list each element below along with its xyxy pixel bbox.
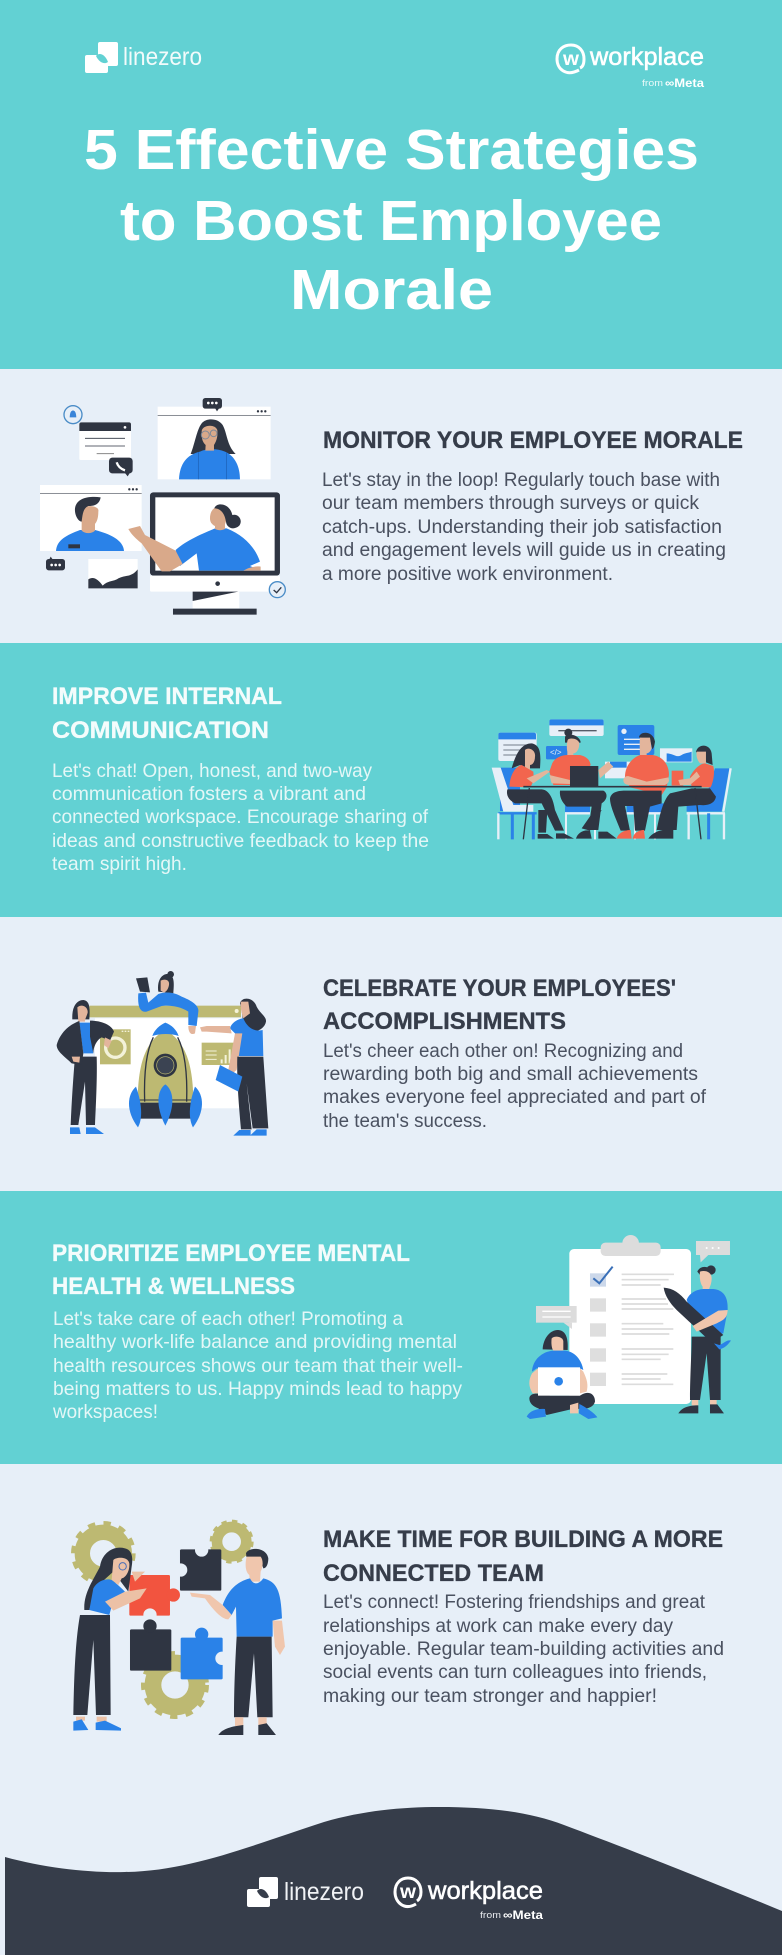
title: 5 Effective Strategies	[84, 118, 699, 182]
body text: catch-ups. Understanding their job satisfaction	[322, 517, 722, 538]
panel: building a connected team	[0, 1464, 782, 1955]
logo: workplace from Meta: ∞Meta	[503, 1908, 543, 1922]
body text: the team's success.	[323, 1111, 487, 1132]
heading	[52, 683, 282, 744]
logo: linezero	[247, 1877, 364, 1907]
panel: celebrate accomplishments	[0, 917, 782, 1191]
standing person with pen	[664, 1265, 731, 1413]
body text: health resources shows our team that their well-	[53, 1356, 463, 1377]
body text: Let's cheer each other on! Recognizing and	[323, 1041, 683, 1062]
body text: making our team stronger and happier!	[323, 1686, 657, 1707]
heading: ACCOMPLISHMENTS	[323, 1008, 566, 1035]
logo: linezero	[85, 42, 202, 73]
illustration: team meeting	[492, 719, 731, 839]
body text: a more positive work environment.	[322, 564, 613, 585]
heading: IMPROVE INTERNAL	[52, 683, 282, 710]
chairs	[492, 768, 731, 839]
body text: team spirit high.	[52, 854, 187, 875]
body text: Let's connect! Fostering friendships and great	[323, 1592, 706, 1613]
logo: workplace from Meta: w	[562, 49, 579, 70]
puzzle pieces	[129, 1543, 229, 1679]
body text: healthy work-life balance and providing mental	[53, 1332, 457, 1353]
logo: linezero: linezero	[123, 43, 202, 71]
browser window	[89, 1006, 241, 1108]
footer wave	[5, 1807, 782, 1955]
body text: being matters to us. Happy minds lead to happy	[53, 1379, 462, 1400]
heading: PRIORITIZE EMPLOYEE MENTAL	[52, 1240, 410, 1267]
illustration: rocket launch	[57, 971, 268, 1136]
panel: monitor employee morale	[0, 369, 782, 643]
heading	[323, 1526, 723, 1587]
body text	[322, 470, 726, 585]
logo: workplace from Meta: from	[480, 1910, 501, 1920]
person 4	[648, 746, 716, 839]
floating cards	[498, 719, 692, 786]
panel: header	[0, 0, 782, 369]
body text	[323, 1592, 724, 1707]
illustration: video call	[40, 398, 285, 615]
person 1	[507, 743, 574, 839]
bubble: chat	[203, 398, 222, 411]
logo: workplace from Meta: workplace	[427, 1877, 543, 1905]
title	[84, 118, 699, 322]
body text: Let's chat! Open, honest, and two-way	[52, 761, 372, 782]
body text: Let's take care of each other! Promoting a	[53, 1309, 403, 1330]
logo: workplace from Meta: w	[399, 1882, 416, 1903]
logo: workplace from Meta: from	[642, 78, 663, 88]
body text: workspaces!	[52, 1402, 158, 1423]
body text: rewarding both big and small achievements	[323, 1064, 698, 1085]
body text	[52, 761, 429, 875]
heading: COMMUNICATION	[52, 717, 269, 744]
panel: mental health and wellness	[0, 1191, 782, 1464]
card: message	[79, 422, 131, 460]
body text: relationships at work can make every day	[323, 1616, 673, 1637]
body text: our team members through surveys or quick	[322, 493, 699, 514]
seated woman with laptop	[527, 1330, 597, 1419]
heading: MAKE TIME FOR BUILDING A MORE	[323, 1526, 723, 1553]
body text: Let's stay in the loop! Regularly touch base with	[322, 470, 720, 491]
body text: communication fosters a vibrant and	[52, 784, 366, 805]
body text	[52, 1309, 463, 1423]
heading: HEALTH & WELLNESS	[52, 1273, 295, 1300]
heading	[52, 1240, 410, 1300]
heading: MONITOR YOUR EMPLOYEE MORALE	[323, 427, 743, 454]
illustration: checklist	[527, 1235, 731, 1419]
panel: improve internal communication	[0, 643, 782, 917]
table	[523, 787, 702, 839]
monitor with presenter	[128, 492, 280, 615]
rocket	[129, 1023, 202, 1127]
body text: social events can turn colleagues into friends,	[323, 1662, 707, 1683]
person 2 with laptop	[549, 729, 617, 839]
logo: workplace from Meta	[395, 1877, 543, 1922]
title: to Boost Employee	[120, 189, 662, 253]
man	[190, 1549, 285, 1735]
heading	[323, 975, 676, 1035]
body text: ideas and constructive feedback to keep the	[52, 831, 429, 852]
logo: workplace from Meta: ∞Meta	[665, 76, 704, 90]
body text: enjoyable. Regular team-building activities and	[323, 1639, 724, 1660]
left person	[57, 1000, 114, 1134]
window: woman with glasses	[158, 407, 271, 479]
right person with folder	[200, 999, 268, 1136]
woman	[73, 1548, 147, 1731]
bubble: small chat	[46, 557, 65, 570]
bubbles	[536, 1241, 730, 1329]
chart	[88, 559, 138, 588]
body text: connected workspace. Encourage sharing of	[52, 807, 429, 828]
logo: linezero: linezero	[284, 1878, 364, 1906]
body text: and engagement levels will guide us in creating	[322, 540, 726, 561]
icon: check	[269, 582, 285, 598]
window: man	[40, 485, 142, 551]
bubble: phone	[109, 458, 133, 476]
heading: CONNECTED TEAM	[323, 1560, 544, 1587]
logo: workplace from Meta	[557, 43, 704, 90]
logo: workplace from Meta: workplace	[589, 43, 704, 71]
person 3	[610, 733, 669, 839]
top woman with tablet	[136, 971, 198, 1034]
title: Morale	[290, 258, 493, 322]
gears	[73, 1521, 252, 1717]
illustration: puzzle team	[73, 1521, 285, 1735]
floating cards: </>	[550, 748, 562, 757]
heading: CELEBRATE YOUR EMPLOYEES'	[323, 975, 676, 1002]
body text: makes everyone feel appreciated and part of	[323, 1087, 707, 1108]
clipboard	[569, 1235, 691, 1404]
icon: bell	[64, 406, 82, 424]
body text	[323, 1041, 707, 1132]
